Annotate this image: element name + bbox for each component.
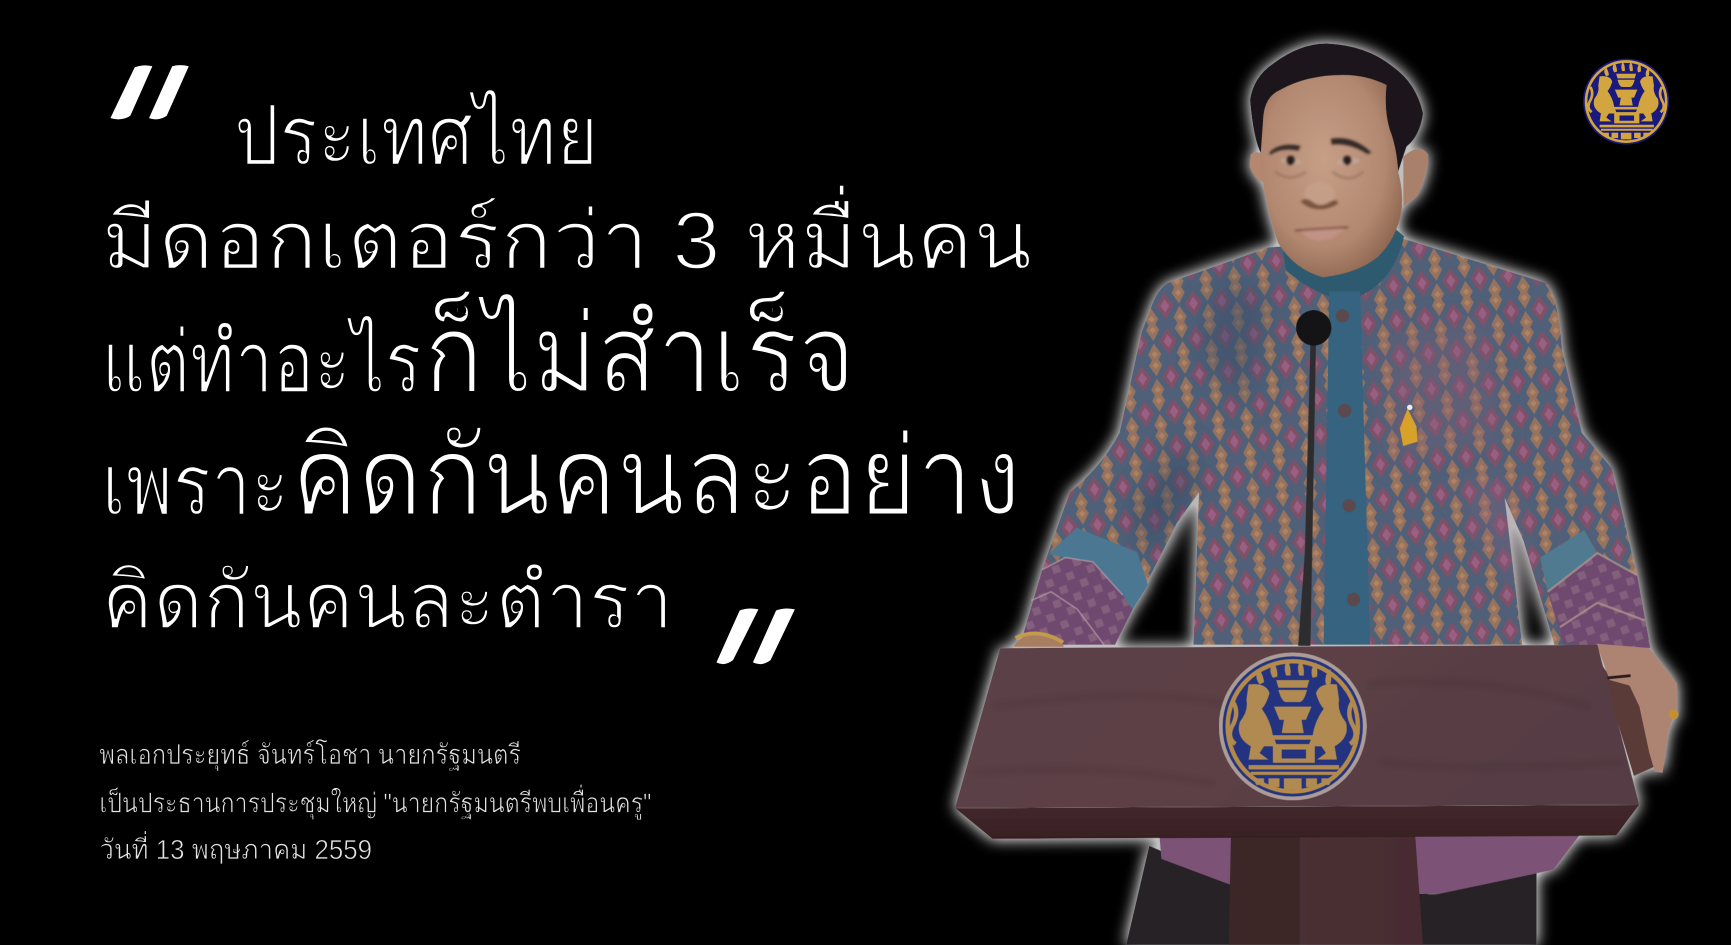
podium wood streaks: [971, 682, 1623, 784]
hair: [1250, 43, 1423, 172]
right cuff: [1540, 530, 1650, 648]
icon: government seal on podium: [1219, 652, 1367, 800]
opening quotation mark: [110, 65, 189, 119]
attribution line 2: เป็นประธานการประชุมใหญ่ "นายกรัฐมนตรีพบเพื่อนครู": [99, 785, 651, 821]
line 1: ประเทศไทย: [234, 88, 598, 182]
left cuff: [1020, 528, 1148, 645]
closing quotation mark: [716, 609, 795, 664]
podium front strip: [955, 805, 1639, 839]
line 3: ก็ไม่สำเร็จ: [424, 289, 856, 416]
microphone: [1296, 310, 1331, 646]
collar: [1283, 215, 1404, 298]
line 3: [102, 289, 856, 416]
line 3: แต่ทำอะไร: [102, 315, 422, 411]
jacket buttons: [1336, 309, 1360, 606]
facial features, softly blurred: [1269, 138, 1372, 241]
placket: [1324, 291, 1370, 645]
line 4: คิดกันคนละอย่าง: [291, 415, 1021, 538]
person and podium with white glow: [955, 43, 1679, 945]
eyebrows: [1269, 138, 1372, 155]
podium top face: [955, 645, 1639, 808]
wooden box beside podium: [1599, 660, 1656, 776]
attribution line 3: วันที่ 13 พฤษภาคม 2559: [99, 831, 372, 865]
line 5: คิดกันคนละตำรา: [102, 556, 673, 645]
jacket body and sleeves: [1020, 238, 1650, 648]
lapel pin: [1400, 405, 1417, 446]
attribution line 1: พลเอกประยุทธ์ จันทร์โอชา นายกรัฐมนตรี: [99, 739, 521, 772]
mouth: [1295, 227, 1348, 241]
jacket shading: [1132, 276, 1534, 618]
head: [1250, 43, 1428, 277]
line 2: มีดอกเตอร์กว่า 3 หมื่นคน: [102, 184, 1032, 286]
face: [1261, 75, 1402, 277]
icon: government seal, top right: [1583, 59, 1669, 145]
quote text: [102, 88, 1032, 645]
right hand: [1596, 644, 1679, 773]
jacket hem: [1159, 833, 1581, 894]
line 4: เพราะ: [102, 437, 289, 533]
nose: [1301, 182, 1339, 209]
eye bags: [1275, 172, 1363, 178]
trousers: [1126, 846, 1537, 945]
podium stand: [1229, 837, 1423, 945]
eyes: [1280, 156, 1361, 165]
attribution text: [99, 739, 651, 865]
left hand and bracelet: [1013, 633, 1064, 647]
ears: [1250, 152, 1265, 183]
